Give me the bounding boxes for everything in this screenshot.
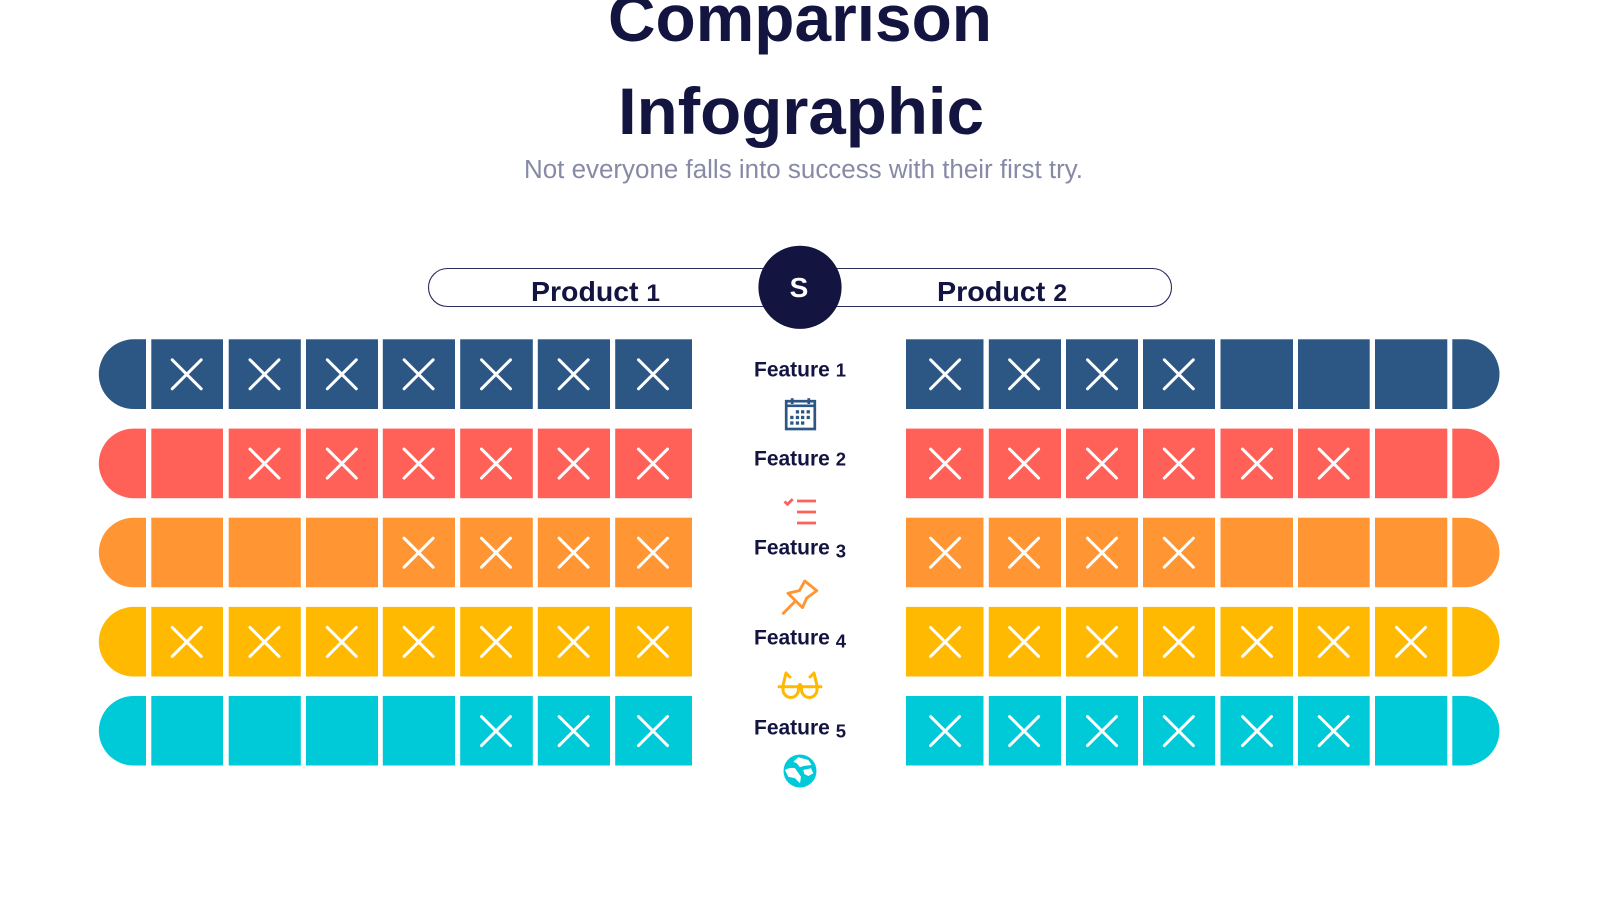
product 2 segments <box>906 607 1499 676</box>
label: Product 2: Product 2 <box>937 276 1067 307</box>
icon: push pin <box>783 581 817 613</box>
row: Feature 1 navy <box>99 339 1500 409</box>
header pill: product names <box>428 268 1172 307</box>
product 1 segments <box>99 339 692 409</box>
row: Feature 5 teal <box>99 696 1499 766</box>
product 1 segments <box>99 607 692 676</box>
center badge S: S <box>790 272 808 303</box>
row: Feature 3 orange <box>99 518 1499 587</box>
product 1 segments <box>99 696 692 766</box>
icon: checklist <box>784 499 816 523</box>
subtitle: Not everyone falls into success with their first try. <box>524 156 1083 184</box>
label: Product 1: Product 1 <box>531 276 660 307</box>
product 2 segments <box>906 696 1499 766</box>
product 2 segments <box>906 339 1500 409</box>
icon: calendar <box>786 398 815 429</box>
product 1 segments <box>99 429 692 498</box>
product 1 segments <box>99 518 692 587</box>
label: Feature 3: 3 <box>836 540 846 562</box>
label: Feature 3: Feature <box>754 536 830 560</box>
title: Infographic <box>618 74 984 148</box>
label: Feature 5: Feature <box>754 716 830 740</box>
icon: globe <box>784 754 816 788</box>
center badge S <box>758 246 842 329</box>
label: Feature 4: 4 <box>836 630 847 652</box>
product 2 segments <box>906 518 1499 587</box>
label: Feature 1: Feature 1 <box>754 359 846 382</box>
label: Feature 5: 5 <box>836 720 846 742</box>
icon: glasses <box>779 673 821 698</box>
label: Feature 2: Feature 2 <box>754 447 846 470</box>
title <box>608 0 992 148</box>
label: Feature 4: Feature <box>754 626 830 650</box>
row: Feature 4 yellow <box>99 607 1499 676</box>
product 2 segments <box>906 429 1500 498</box>
row: Feature 2 coral <box>99 429 1499 498</box>
